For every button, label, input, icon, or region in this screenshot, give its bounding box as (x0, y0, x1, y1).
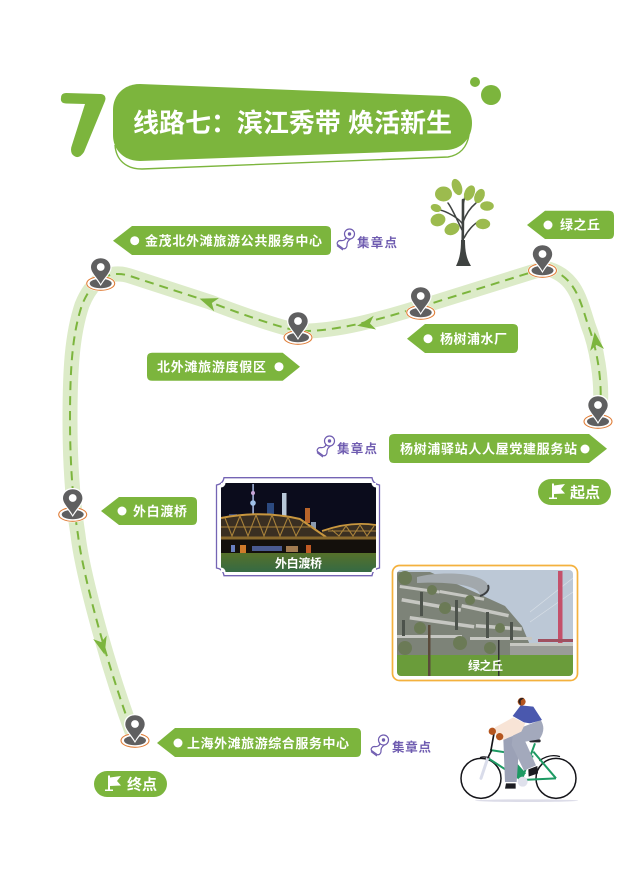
head (518, 698, 526, 706)
photo caption: 外白渡桥 (275, 556, 322, 570)
wheels (461, 756, 576, 798)
large number 7 (61, 93, 106, 157)
route dashes (70, 268, 601, 740)
photo caption: 绿之丘 (468, 658, 503, 673)
icon: tree (429, 177, 494, 266)
tag: 绿之丘 (527, 211, 614, 239)
skyline (229, 484, 316, 529)
photo frame (216, 478, 380, 576)
chimney (558, 571, 562, 643)
tag: 杨树浦驿站人人屋党建服务站: 杨树浦驿站人人屋党建服务站 (400, 442, 577, 456)
end badge (94, 771, 167, 797)
tag: 杨树浦驿站人人屋党建服务站 (389, 434, 607, 463)
tag: 杨树浦水厂 (407, 324, 518, 353)
near leg (512, 720, 543, 771)
pin: 终点 (120, 714, 150, 748)
foreground grass (397, 655, 573, 676)
tag: 上海外滩旅游综合服务中心 (157, 728, 361, 757)
tag: 北外滩旅游度假区 (147, 353, 300, 381)
stamp label 1: 集章点 (357, 235, 397, 250)
pin: 起点 (583, 395, 613, 429)
direction arrows (588, 331, 604, 351)
tag: 北外滩旅游度假区: 北外滩旅游度假区 (157, 360, 266, 374)
icon: flag (105, 776, 121, 791)
arm (495, 717, 525, 740)
tag: 绿之丘: 绿之丘 (560, 218, 600, 233)
icon: flag (549, 484, 565, 499)
tree leaves (429, 177, 494, 238)
top ramp (417, 573, 489, 596)
stamp label 3: 集章点 (392, 740, 431, 754)
illustration: cyclist (461, 698, 578, 802)
bridge body (221, 514, 326, 537)
terraces (397, 585, 573, 646)
building image (397, 570, 573, 676)
pin: 金茂北外滩 (86, 257, 116, 291)
night bridge image (221, 483, 376, 572)
stamp label 1 (337, 229, 397, 250)
map pins (58, 244, 613, 748)
terrace columns and foliage (402, 592, 513, 640)
stamp label 2 (317, 436, 377, 457)
end badge: 终点 (127, 776, 157, 794)
crank (518, 777, 528, 787)
fork and handlebar (481, 758, 488, 778)
photo: 外白渡桥 (216, 478, 380, 576)
ground shadow (475, 799, 578, 802)
far leg (503, 733, 520, 782)
title text: 线路七：滨江秀带 焕活新生 (133, 108, 452, 138)
bridge truss (221, 514, 376, 538)
pin: 绿之丘 (528, 244, 558, 278)
image corner notches (221, 483, 376, 572)
photo: 绿之丘 (392, 566, 578, 680)
water reflections (231, 545, 311, 553)
photo frame (392, 566, 578, 680)
start badge (538, 479, 611, 505)
banner body (113, 84, 472, 161)
tag: 杨树浦水厂: 杨树浦水厂 (440, 332, 507, 346)
tag: 金茂北外滩旅游公共服务中心 (113, 226, 331, 255)
tag: 金茂北外滩旅游公共服务中心: 金茂北外滩旅游公共服务中心 (145, 234, 322, 248)
title banner (113, 84, 472, 169)
tree trunk and branches (440, 196, 478, 262)
tag: 上海外滩旅游综合服务中心: 上海外滩旅游综合服务中心 (187, 736, 349, 751)
start badge: 起点 (570, 484, 600, 502)
pin: 杨树浦水厂 (406, 286, 436, 320)
hands (489, 728, 496, 735)
building mass (397, 572, 530, 662)
tag: 外白渡桥: 外白渡桥 (133, 504, 187, 519)
stamp label 2: 集章点 (337, 441, 377, 456)
stamp label 3 (371, 735, 431, 756)
route path (70, 268, 604, 740)
tag: 外白渡桥 (101, 497, 197, 525)
pin: 外白渡桥 (58, 488, 88, 522)
saddle (529, 739, 541, 742)
route band (70, 268, 601, 740)
shoes (505, 783, 516, 789)
decorative green dots (470, 77, 501, 105)
torso (513, 705, 542, 723)
bike frame (488, 743, 556, 780)
banner shadow outline (115, 135, 469, 169)
pin: 北外滩旅游度假区 (283, 311, 313, 345)
